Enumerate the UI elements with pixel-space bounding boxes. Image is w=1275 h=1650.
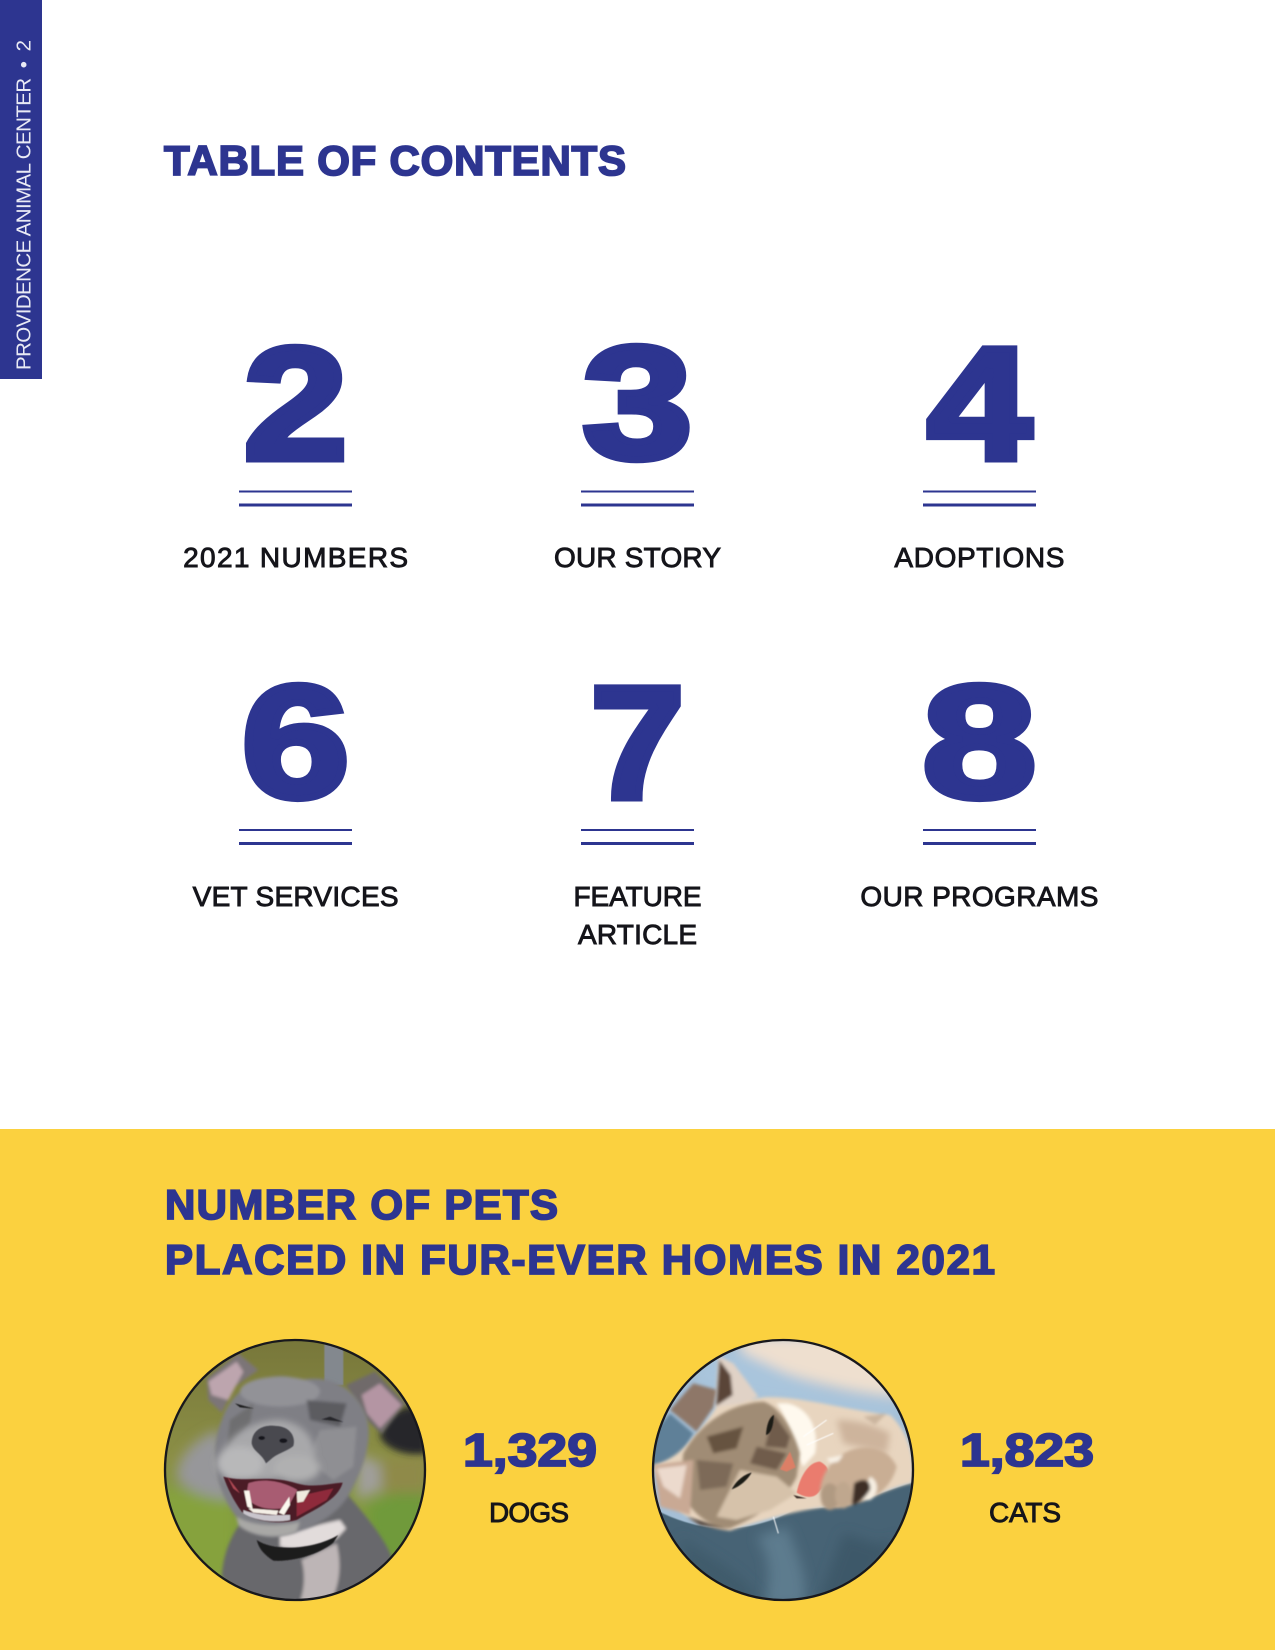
dog head (215, 1376, 369, 1537)
contents item: page 3: 3 (582, 313, 692, 492)
contents item: page 4: 4 (927, 314, 1031, 493)
contents item: page 6 (193, 652, 399, 912)
panel heading: PLACED IN FUR-EVER HOMES IN 2021 (165, 1236, 995, 1283)
dog ears (207, 1353, 406, 1434)
sidebar tab: PROVIDENCE ANIMAL CENTER • 2 (12, 40, 36, 370)
stat: dogs: DOGS (489, 1497, 569, 1528)
contents item: page 6: VET SERVICES (193, 881, 399, 912)
panel: pets placed (0, 1129, 1275, 1650)
contents item: page 7: FEATURE (574, 881, 702, 912)
contents item: page 2: 2 (244, 314, 348, 493)
sidebar tab (0, 0, 42, 379)
panel heading: NUMBER OF PETS (165, 1181, 558, 1228)
contents item: page 2 (183, 314, 408, 573)
cat paw (820, 1447, 897, 1510)
contents item: page 8: 8 (922, 652, 1036, 831)
photo: cat licking paw (650, 1337, 920, 1610)
panel heading (165, 1181, 995, 1283)
contents item: page 6: 6 (242, 652, 350, 831)
cat blanket (661, 1482, 912, 1598)
photo: smiling dog (160, 1337, 430, 1607)
contents item: page 7: 7 (590, 653, 684, 832)
stat: dogs: 1,329 (463, 1424, 597, 1476)
contents item: page 2: 2021 NUMBERS (183, 542, 408, 573)
stat: dogs (463, 1424, 597, 1528)
cat head (654, 1402, 800, 1530)
dog body (222, 1493, 392, 1607)
cat body (654, 1356, 913, 1531)
contents item: page 4 (894, 314, 1064, 573)
cat face details (732, 1415, 833, 1533)
stat: cats (960, 1424, 1094, 1528)
contents item: page 3 (554, 313, 721, 573)
contents item: page 3: OUR STORY (554, 542, 721, 573)
dog face details (223, 1403, 343, 1522)
contents item: page 7 (574, 653, 702, 950)
contents item: page 8: OUR PROGRAMS (860, 881, 1098, 912)
contents item: page 7: ARTICLE (578, 919, 697, 950)
contents item: page 8 (860, 652, 1098, 912)
contents item: page 4: ADOPTIONS (894, 542, 1064, 573)
stat: cats: 1,823 (960, 1424, 1094, 1476)
stat: cats: CATS (989, 1497, 1061, 1528)
title: table of contents: TABLE OF CONTENTS (164, 137, 626, 184)
